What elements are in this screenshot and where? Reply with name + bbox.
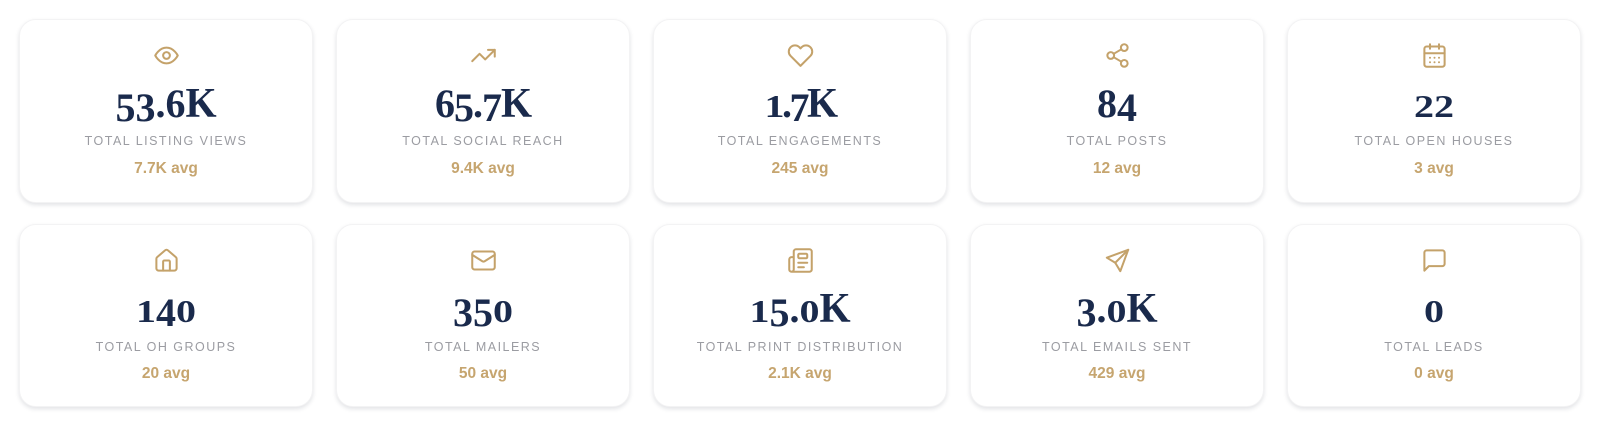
card: total print distribution [653, 224, 947, 407]
icon: heart [788, 44, 814, 67]
value: 6 [165, 81, 185, 126]
average: 245 avg [772, 160, 828, 177]
card: total listing views [19, 19, 313, 203]
value: 0 [1106, 293, 1126, 329]
value: K [819, 284, 851, 332]
value: 3 [1076, 290, 1096, 335]
card: total oh groups [19, 224, 313, 407]
card: total mailers [336, 224, 630, 407]
value: . [782, 81, 789, 126]
value: 5 [473, 290, 493, 335]
label: TOTAL LEADS [1384, 340, 1484, 354]
value [136, 290, 196, 335]
value: . [789, 286, 799, 331]
card: total emails sent [970, 224, 1264, 407]
icon: share [1106, 43, 1129, 68]
card: total leads [1287, 224, 1581, 407]
label: TOTAL PRINT DISTRIBUTION [697, 340, 903, 354]
value: 1 [136, 293, 156, 329]
value: 0 [799, 293, 819, 329]
card: total social reach [336, 19, 630, 203]
value: K [185, 79, 217, 127]
icon: home [155, 248, 178, 272]
value [435, 79, 532, 130]
icon: newspaper [788, 248, 813, 273]
label: TOTAL ENGAGEMENTS [718, 134, 882, 148]
value [1097, 81, 1137, 130]
card: total posts [970, 19, 1264, 203]
average: 0 avg [1414, 365, 1454, 382]
value: 8 [1097, 81, 1117, 126]
value: K [1126, 284, 1158, 332]
value: 7 [482, 85, 501, 130]
average: 12 avg [1093, 160, 1141, 177]
average: 20 avg [142, 365, 190, 382]
value: . [155, 81, 165, 126]
label: TOTAL SOCIAL REACH [402, 134, 564, 148]
icon: mail [471, 250, 496, 270]
value [749, 284, 851, 335]
value: 3 [453, 290, 473, 335]
label: TOTAL POSTS [1067, 134, 1167, 148]
value: 2 [1414, 88, 1434, 124]
card: total open houses [1287, 19, 1581, 203]
value: 4 [156, 290, 176, 335]
average: 7.7K avg [134, 160, 198, 177]
icon: message [1423, 249, 1446, 272]
value: . [473, 81, 482, 126]
value [1414, 88, 1454, 124]
icon: eye [154, 46, 179, 64]
value [453, 290, 513, 335]
icon: send [1106, 248, 1130, 272]
value: 0 [1424, 293, 1444, 329]
value: 0 [176, 293, 196, 329]
average: 50 avg [459, 365, 507, 382]
label: TOTAL EMAILS SENT [1042, 340, 1192, 354]
value: 0 [493, 293, 513, 329]
value: 5 [454, 85, 473, 130]
value [1076, 284, 1158, 335]
value: . [1096, 286, 1106, 331]
value: 1 [764, 88, 782, 124]
value: K [807, 79, 836, 127]
value: K [501, 79, 531, 127]
value: 2 [1434, 88, 1454, 124]
label: TOTAL OPEN HOUSES [1354, 134, 1514, 148]
average: 2.1K avg [768, 365, 832, 382]
card: total engagements [653, 19, 947, 203]
label: TOTAL MAILERS [425, 340, 541, 354]
label: TOTAL LISTING VIEWS [85, 134, 247, 148]
value [115, 79, 217, 130]
icon: calendar [1423, 43, 1446, 68]
value: 5 [115, 85, 135, 130]
value: 1 [749, 293, 769, 329]
value: 7 [789, 85, 807, 130]
average: 429 avg [1089, 365, 1145, 382]
average: 3 avg [1414, 160, 1454, 177]
label: TOTAL OH GROUPS [96, 340, 236, 354]
value: 3 [135, 85, 155, 130]
value: 6 [435, 81, 454, 126]
icon: trending up [471, 48, 496, 62]
value: 5 [769, 290, 789, 335]
value [764, 79, 838, 130]
average: 9.4K avg [451, 160, 515, 177]
value: 4 [1117, 85, 1137, 130]
